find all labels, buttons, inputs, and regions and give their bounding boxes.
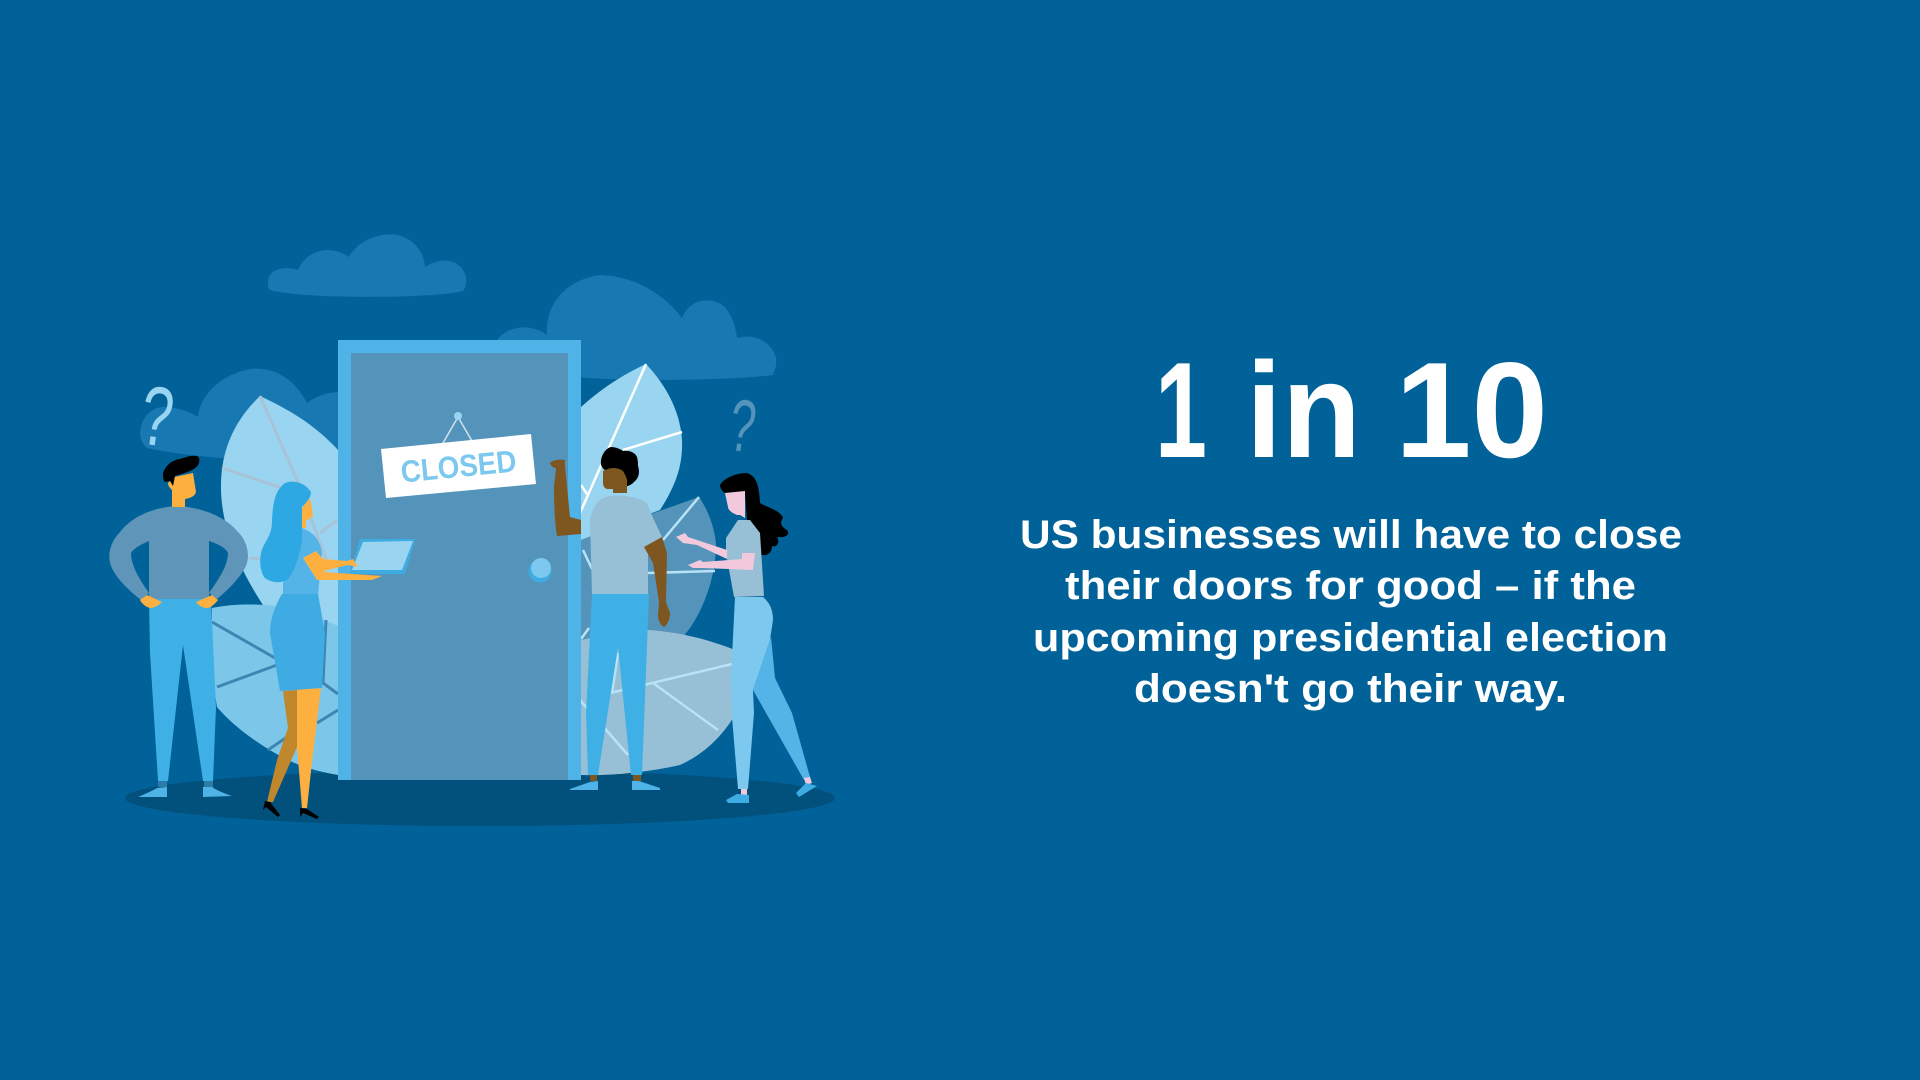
headline statistic: in [1246,334,1361,486]
arms [676,533,755,570]
supporting text: doesn't go their way. [1134,667,1567,711]
headline statistic [1155,334,1548,486]
hands [140,595,218,608]
leaf: left upper [221,396,338,626]
face and neck [603,468,627,493]
skirt [270,594,325,691]
pants [586,594,649,775]
person: man hands on hips [109,456,248,797]
ground shadow [125,770,835,826]
supporting text: their doors for good – if the [1065,564,1636,608]
closed sign [381,412,536,498]
back leg [753,637,810,780]
person: woman gesturing [676,473,817,803]
pants [149,599,216,781]
cloud: right behind door [498,275,776,380]
top [283,528,322,595]
laptop [350,539,415,574]
ankles [590,775,641,781]
front leg [297,688,321,808]
cloud: top centre [268,234,466,297]
shoes [570,781,660,790]
door knob [528,558,552,582]
lowered arm [644,537,670,627]
curly hair [601,447,639,486]
cloud: left behind door [140,369,340,470]
torso [590,495,662,594]
shoes [138,787,232,797]
door [338,340,581,780]
question mark: right: ? [724,384,761,469]
ankles [741,777,812,795]
person: man knocking [550,447,670,790]
sign text: CLOSED [399,443,518,490]
face [302,498,313,528]
person: woman with laptop [260,482,415,819]
socks [158,781,213,787]
leaf: right bottom [580,630,735,775]
heels [263,801,319,819]
hair [163,456,199,486]
top [726,520,764,597]
sign hanger [443,412,472,443]
arms [303,551,382,580]
leaf: left lower [212,604,338,775]
back leg [267,690,299,802]
headline statistic: 10 [1395,334,1548,486]
face [725,491,745,518]
hair [260,482,311,582]
front leg [731,597,773,789]
neck and face [168,473,196,507]
leaf: right light [580,364,682,540]
supporting text: US businesses will have to close [1020,513,1682,557]
question mark: left: ? [135,369,179,466]
raised arm [550,460,581,536]
torso and arms [109,506,248,600]
supporting text [1020,513,1682,711]
shoes [726,783,817,803]
supporting text: upcoming presidential election [1033,616,1668,660]
headline statistic: 1 [1155,334,1207,486]
leaf: right dark [581,497,716,640]
door frame [338,340,581,780]
hair [720,473,788,555]
sign board [381,434,536,498]
door panel [351,353,568,780]
